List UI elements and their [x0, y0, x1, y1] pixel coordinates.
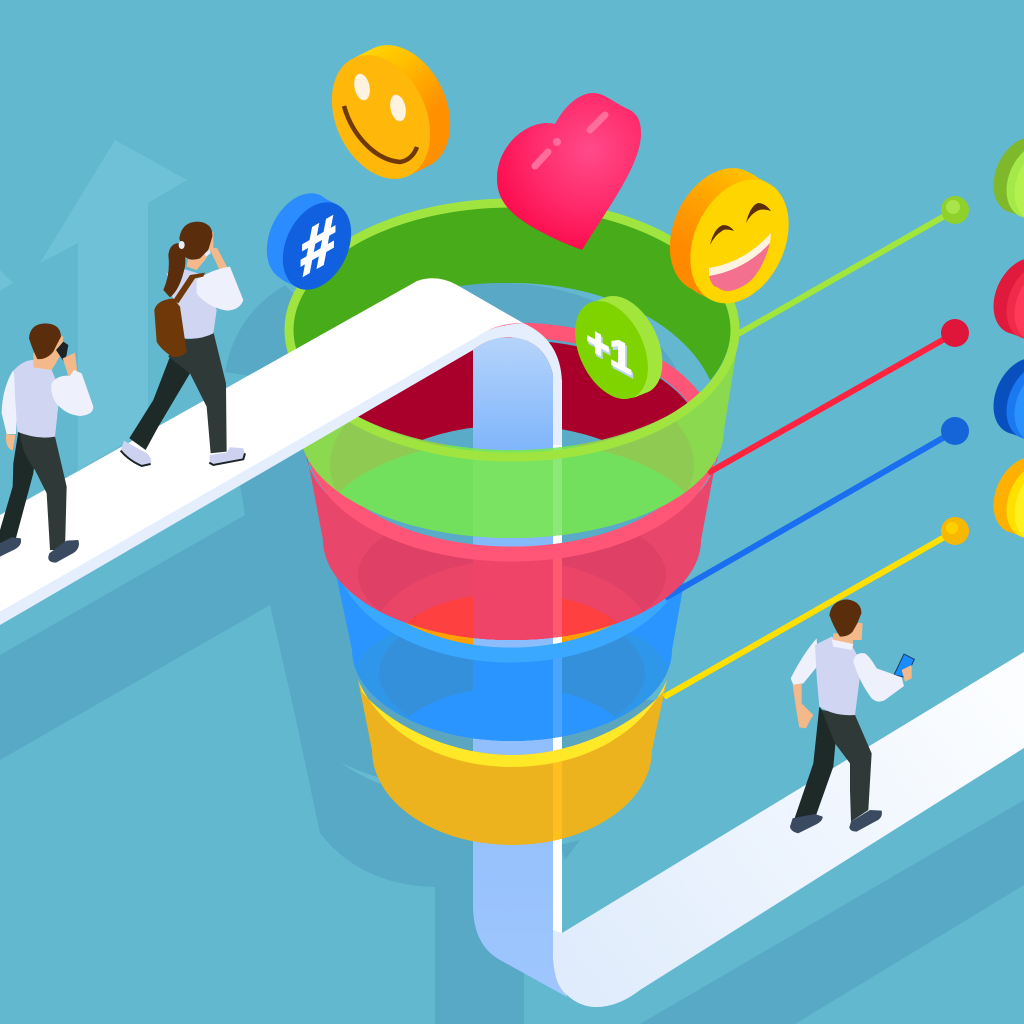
funnel band: blue: [336, 577, 684, 741]
funnel band: yellow: [358, 680, 667, 845]
connector line: yellow: [664, 517, 969, 697]
person: man on phone: [0, 323, 93, 563]
icon: plus one coin: +1: [588, 318, 633, 387]
icon: hashtag coin: [253, 182, 365, 301]
icon: smiley coin: [313, 29, 469, 195]
funnel band: green: [284, 198, 740, 538]
icon: plus one coin: [561, 284, 677, 411]
upper conveyor belt: [0, 278, 562, 625]
shadow highlight arc: [340, 762, 380, 784]
vertical conveyor belt: [473, 337, 567, 997]
person: man with smartphone: [790, 599, 914, 833]
icon: plus one coin: +1: [586, 315, 632, 384]
icon: yellow coin cropped: [982, 447, 1024, 551]
icon: blue coin cropped: [982, 348, 1024, 452]
background arrow: [0, 140, 187, 470]
icon: laughing coin: [651, 152, 808, 319]
icon: heart: [497, 93, 641, 250]
connector line: blue: [665, 417, 969, 598]
funnel band: red: [306, 322, 718, 640]
funnel interior: [293, 205, 731, 755]
person: woman with backpack: [121, 222, 245, 466]
icon: red coin cropped: [982, 248, 1024, 352]
connector line: lime: [738, 196, 969, 334]
lower conveyor belt: [553, 652, 1024, 1007]
icon: hashtag coin: #: [301, 201, 335, 291]
floor shadows: [0, 285, 1024, 1024]
icon: lime coin cropped: [982, 127, 1024, 231]
connector line: red: [708, 319, 969, 473]
